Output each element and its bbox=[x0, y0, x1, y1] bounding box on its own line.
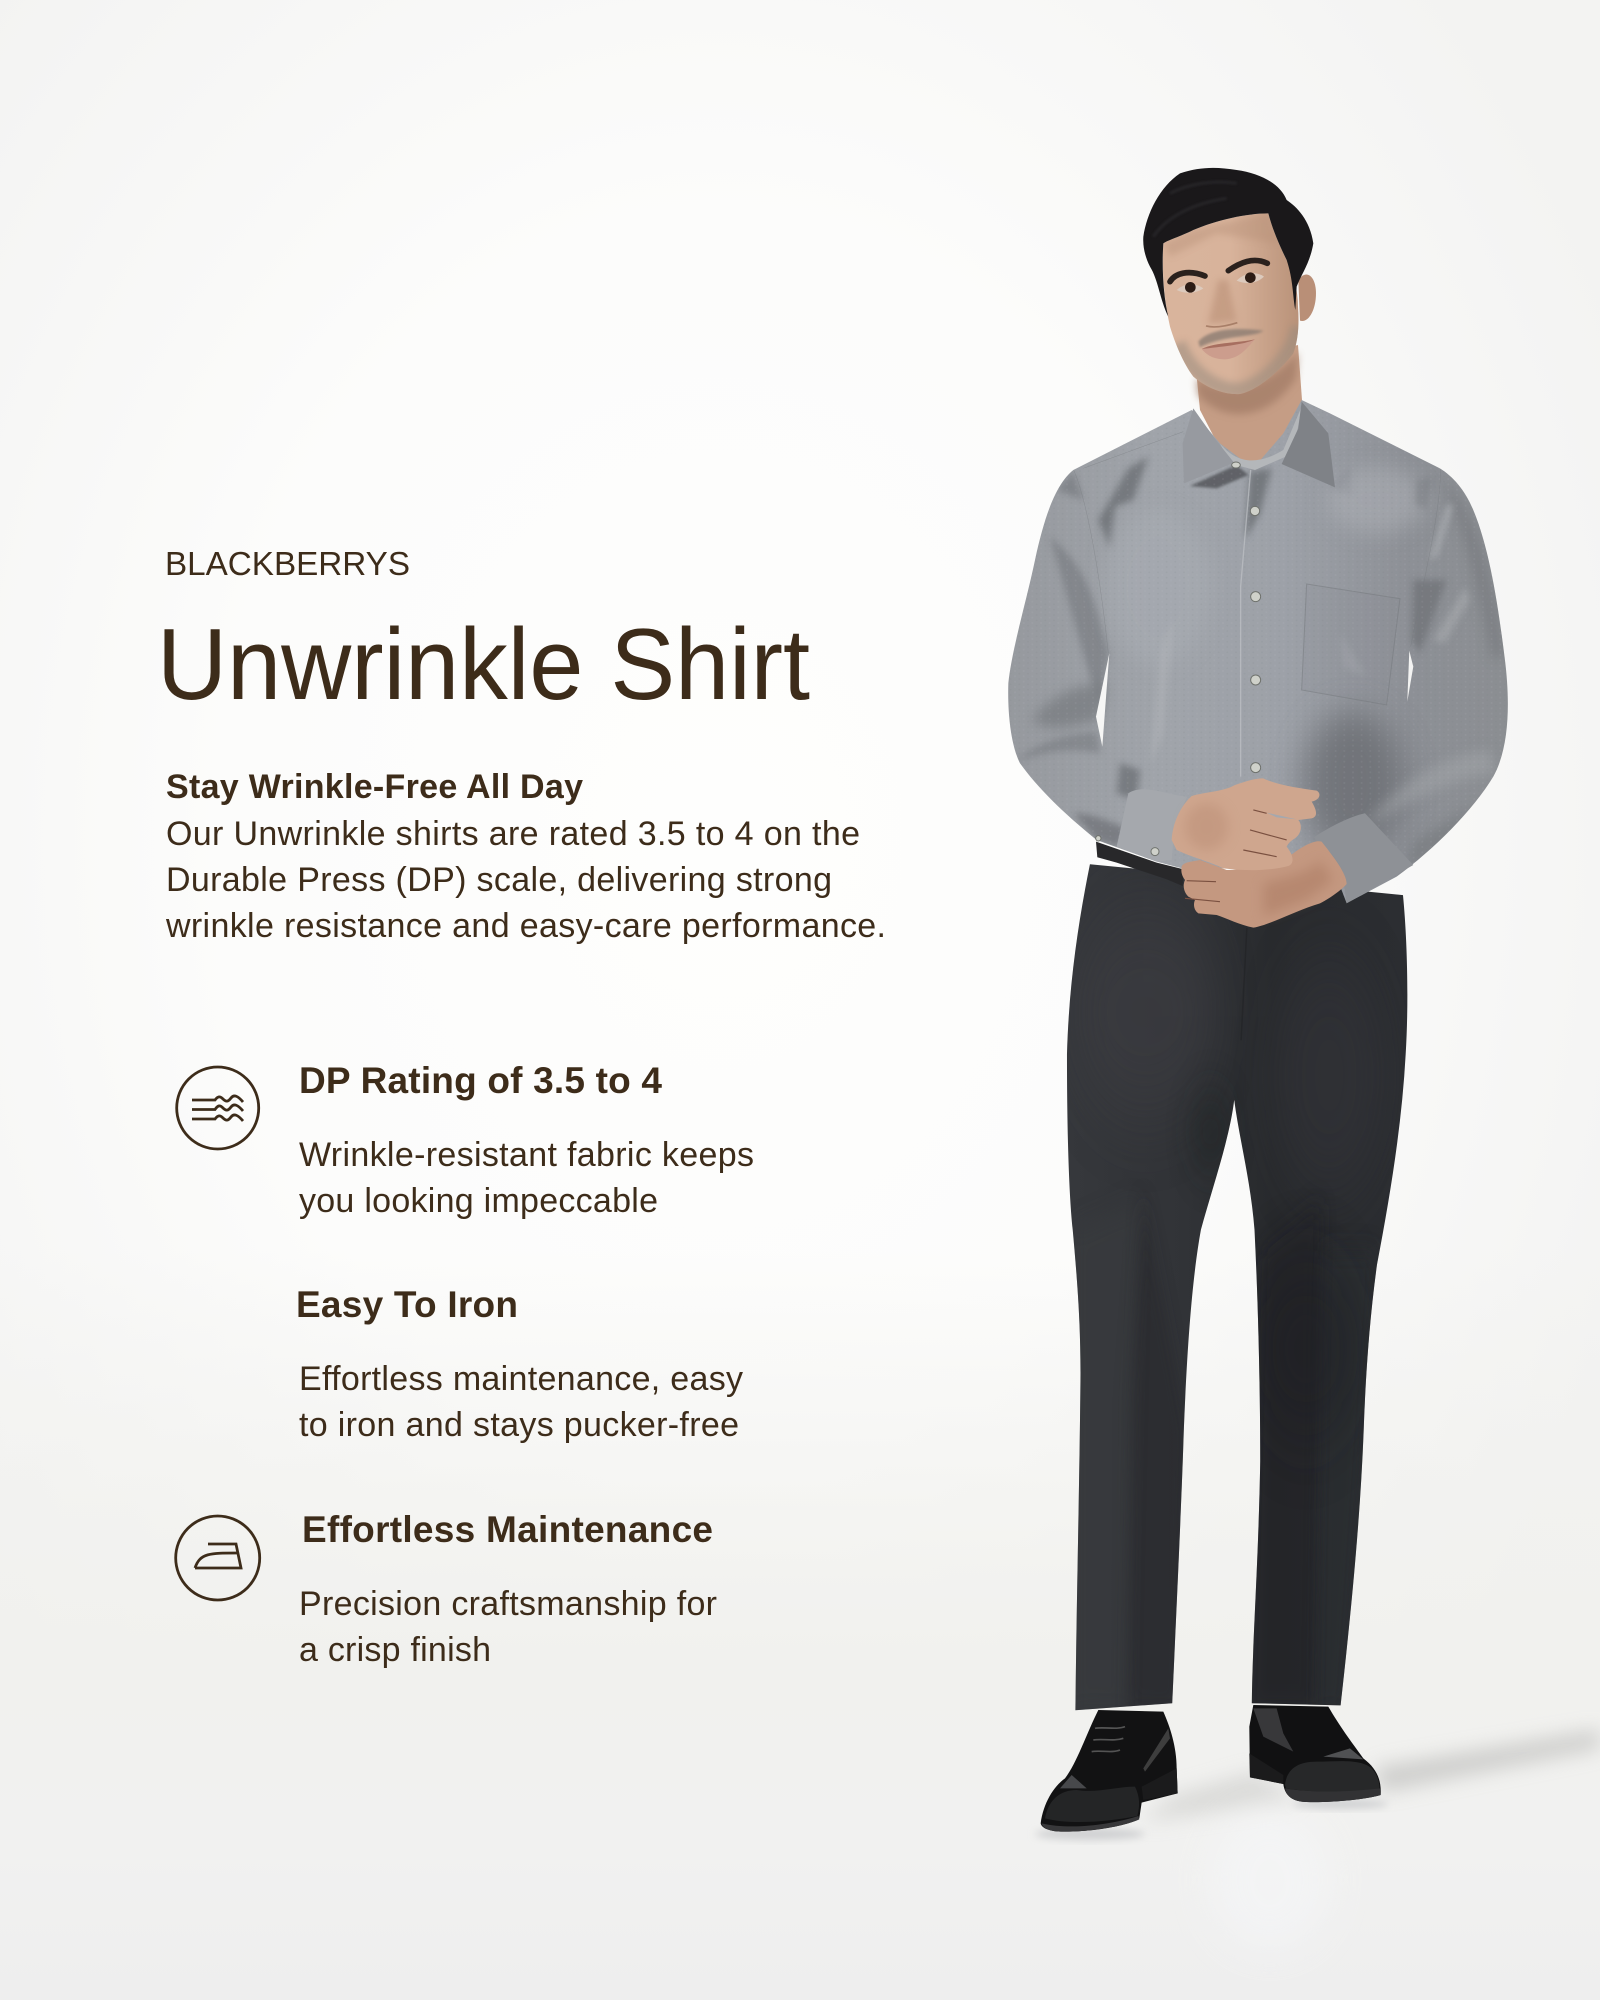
left cuff bbox=[1117, 789, 1187, 862]
feature description: Effortless maintenance, easy bbox=[299, 1360, 743, 1398]
inner neck band bbox=[1220, 407, 1302, 470]
right collar bbox=[1282, 402, 1335, 487]
icon: wrinkle-resistant fabric waves bbox=[177, 1067, 259, 1149]
face bbox=[1163, 213, 1299, 394]
placket edge bbox=[1241, 470, 1251, 777]
floor shadow bbox=[1035, 1730, 1600, 1950]
hair highlights bbox=[1153, 182, 1237, 237]
pocket bbox=[1302, 584, 1400, 705]
feature description: to iron and stays pucker-free bbox=[299, 1406, 739, 1444]
belt bbox=[1096, 842, 1183, 886]
brand name: BLACKBERRYS bbox=[165, 545, 410, 582]
moustache bbox=[1198, 329, 1263, 347]
head bbox=[1143, 168, 1316, 394]
trousers bbox=[1067, 864, 1407, 1714]
feature heading: Easy To Iron bbox=[296, 1284, 518, 1325]
shirt glimpse between fingers bbox=[1267, 813, 1297, 819]
hands bbox=[1172, 778, 1347, 928]
finger creases bbox=[1185, 810, 1287, 902]
upper hand bbox=[1172, 778, 1319, 870]
icon: iron bbox=[176, 1516, 260, 1600]
title: Unwrinkle Shirt bbox=[157, 609, 810, 721]
intro body: wrinkle resistance and easy-care performance. bbox=[165, 907, 886, 945]
right cuff bbox=[1314, 813, 1413, 903]
seams bbox=[1074, 432, 1441, 653]
feature description bbox=[299, 1360, 743, 1444]
left shoe bbox=[1041, 1710, 1178, 1832]
nostril line bbox=[1206, 323, 1237, 327]
feature description bbox=[299, 1585, 717, 1669]
forehead shading bbox=[1166, 218, 1268, 254]
neck bbox=[1196, 345, 1302, 467]
lips bbox=[1202, 339, 1255, 359]
ear bbox=[1298, 275, 1316, 321]
feature heading: DP Rating of 3.5 to 4 bbox=[299, 1060, 662, 1101]
right shoe bbox=[1249, 1705, 1381, 1802]
feature description: a crisp finish bbox=[299, 1631, 491, 1669]
feature description: Wrinkle-resistant fabric keeps bbox=[299, 1136, 754, 1174]
eyes bbox=[1177, 272, 1264, 293]
hair bbox=[1143, 168, 1313, 317]
feature: DP rating bbox=[299, 1060, 754, 1220]
feature: effortless maintenance bbox=[299, 1509, 717, 1669]
nose shading bbox=[1208, 280, 1237, 323]
intro heading: Stay Wrinkle-Free All Day bbox=[166, 768, 583, 806]
intro body: Durable Press (DP) scale, delivering strong bbox=[166, 861, 832, 899]
lower hand bbox=[1181, 841, 1347, 928]
feature: easy to iron bbox=[296, 1284, 743, 1444]
left collar bbox=[1183, 408, 1234, 483]
feature description bbox=[299, 1136, 754, 1220]
intro body: Our Unwrinkle shirts are rated 3.5 to 4 on the bbox=[166, 815, 860, 853]
arm gaps bbox=[1096, 651, 1413, 747]
model photo illustration bbox=[1000, 168, 1600, 1950]
shirt shading bbox=[1000, 400, 1520, 920]
trouser shading bbox=[1073, 907, 1387, 1714]
feature description: you looking impeccable bbox=[299, 1182, 658, 1220]
eyebrows bbox=[1170, 260, 1267, 282]
beard stubble bbox=[1178, 327, 1298, 390]
buttons bbox=[1096, 462, 1261, 856]
feature description: Precision craftsmanship for bbox=[299, 1585, 717, 1623]
feature heading: Effortless Maintenance bbox=[302, 1509, 713, 1550]
shirt bbox=[1000, 400, 1520, 920]
intro text block bbox=[165, 768, 886, 945]
intro body bbox=[165, 815, 886, 945]
